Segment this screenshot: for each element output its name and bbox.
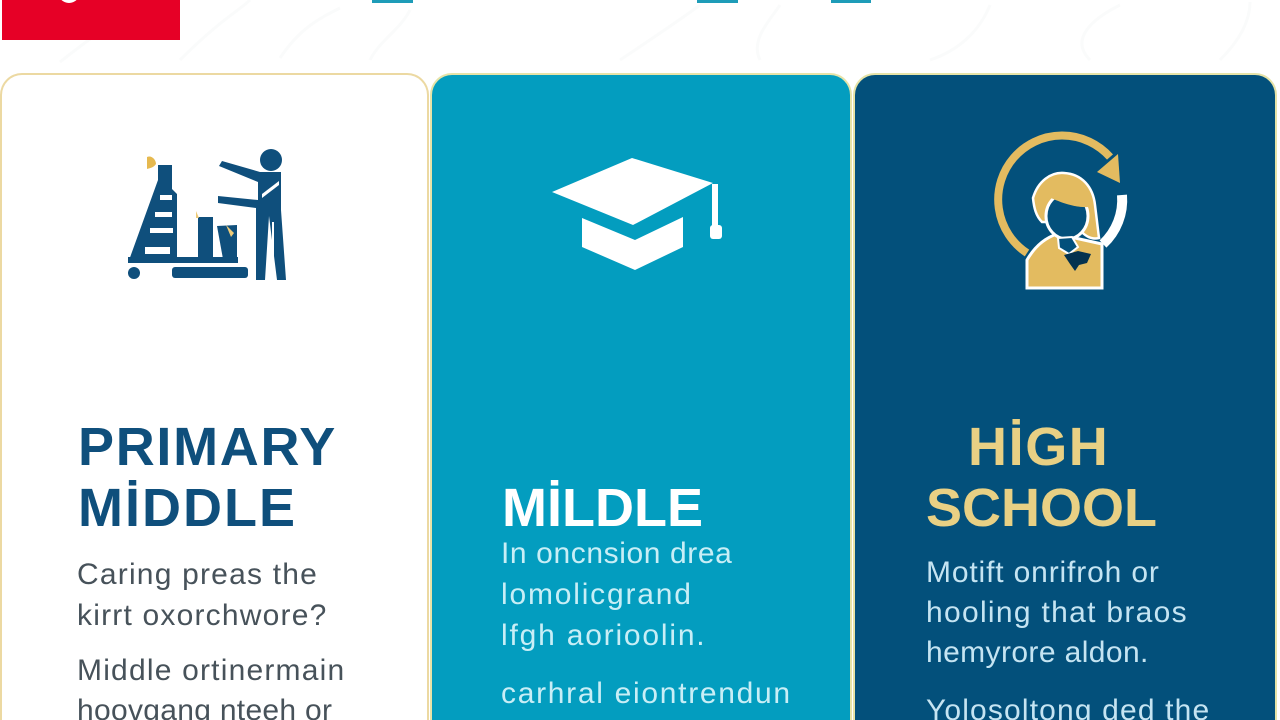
icon: student in circular arrow xyxy=(994,132,1128,290)
body text: lfgh aorioolin. xyxy=(501,619,706,652)
heading: HİGH xyxy=(968,417,1109,477)
body text xyxy=(501,539,792,710)
body text xyxy=(77,560,345,720)
body text: Middle ortinermain xyxy=(77,654,345,687)
badge white glyph fragment xyxy=(58,0,80,3)
panel: high school xyxy=(853,73,1277,720)
body text: carhral eiontrendun xyxy=(501,677,792,710)
heading second line: SCHOOL xyxy=(926,478,1157,538)
cut-off header title fragments xyxy=(372,0,871,3)
heading: PRIMARY xyxy=(78,417,337,477)
red header badge xyxy=(2,0,180,40)
panel: primary xyxy=(0,73,429,720)
body text: hemyrore aldon. xyxy=(926,636,1149,669)
body text: kirrt oxorchwore? xyxy=(77,599,327,632)
body text: hooling that braos xyxy=(926,596,1188,629)
heading: MİLDLE xyxy=(502,478,703,538)
heading second line: MİDDLE xyxy=(78,478,297,538)
icon: teacher with books xyxy=(128,149,286,280)
body text: lomolicgrand xyxy=(501,578,693,611)
body text xyxy=(926,558,1210,720)
panel: middle xyxy=(430,73,852,720)
icon: graduation cap xyxy=(552,158,722,270)
